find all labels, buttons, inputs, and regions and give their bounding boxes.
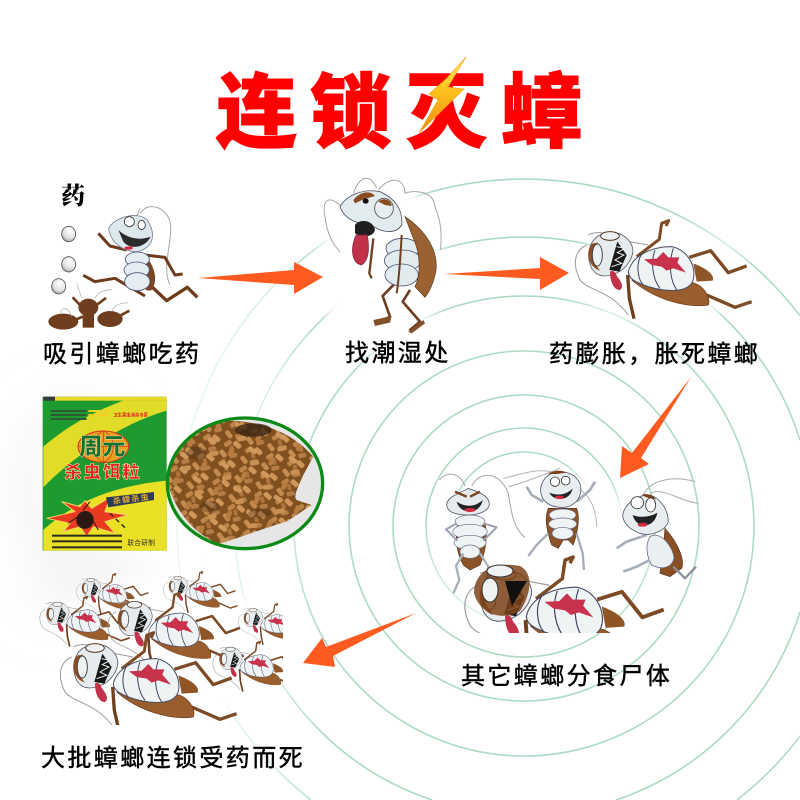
icon: bait pellets (52, 226, 76, 294)
bait package: 杀蟑杀虫 (112, 492, 151, 507)
bait granules oval (165, 418, 323, 549)
arrow 2 (444, 257, 569, 290)
label: 药膨胀，胀死蟑螂: 药膨胀，胀死蟑螂 (549, 341, 760, 368)
title: 连锁灭蟑: 蟑 (501, 69, 582, 159)
left fade over rings (170, 170, 320, 800)
title: 连锁灭蟑: 连 (216, 69, 297, 159)
icon: lightning bolt (419, 57, 466, 133)
label: bait character: 药 (61, 176, 85, 211)
explosion graphic (47, 497, 128, 537)
brand emblem (78, 431, 129, 462)
cockroach A (439, 474, 525, 593)
dead cockroach being eaten (464, 555, 664, 633)
label: 找潮湿处: 找潮湿处 (345, 340, 451, 367)
step 2 figure: thirsty cockroach (324, 178, 441, 333)
small cockroaches (48, 283, 129, 330)
title: 连锁灭蟑: 锁 (310, 69, 391, 159)
label: 大批蟑螂连锁受药而死: 大批蟑螂连锁受药而死 (41, 745, 305, 772)
joint development text: 联合研制 (127, 537, 155, 547)
step 5 figure: many dead cockroaches (40, 571, 283, 725)
title: 连锁灭蟑: 灭 (406, 69, 487, 159)
concentric green ripple rings (177, 179, 800, 800)
arrow 4 (303, 613, 416, 667)
package tagline: 卫生害虫消杀专家 (113, 412, 149, 419)
background shading (20, 400, 165, 615)
step 1 figure: roach running to bait (48, 176, 197, 330)
bait package (43, 397, 167, 551)
label: 吸引蟑螂吃药: 吸引蟑螂吃药 (43, 341, 201, 368)
title: 连锁灭蟑 (216, 57, 582, 159)
cockroach C (617, 479, 698, 578)
arrow 1 (198, 262, 323, 294)
white glow patches hiding rings behind figures (20, 175, 745, 720)
arrow 3 (620, 377, 691, 478)
step 4 figure: cockroaches feeding on corpse (439, 468, 698, 633)
running cockroach (48, 207, 197, 330)
slogan tab (106, 492, 154, 507)
step 3 figure: bloated dead cockroach (575, 221, 752, 319)
product name: 杀虫饵粒 (64, 458, 142, 483)
label: 其它蟑螂分食尸体: 其它蟑螂分食尸体 (461, 663, 672, 690)
cockroach B (503, 468, 597, 570)
brand name: 周元 (79, 428, 126, 462)
